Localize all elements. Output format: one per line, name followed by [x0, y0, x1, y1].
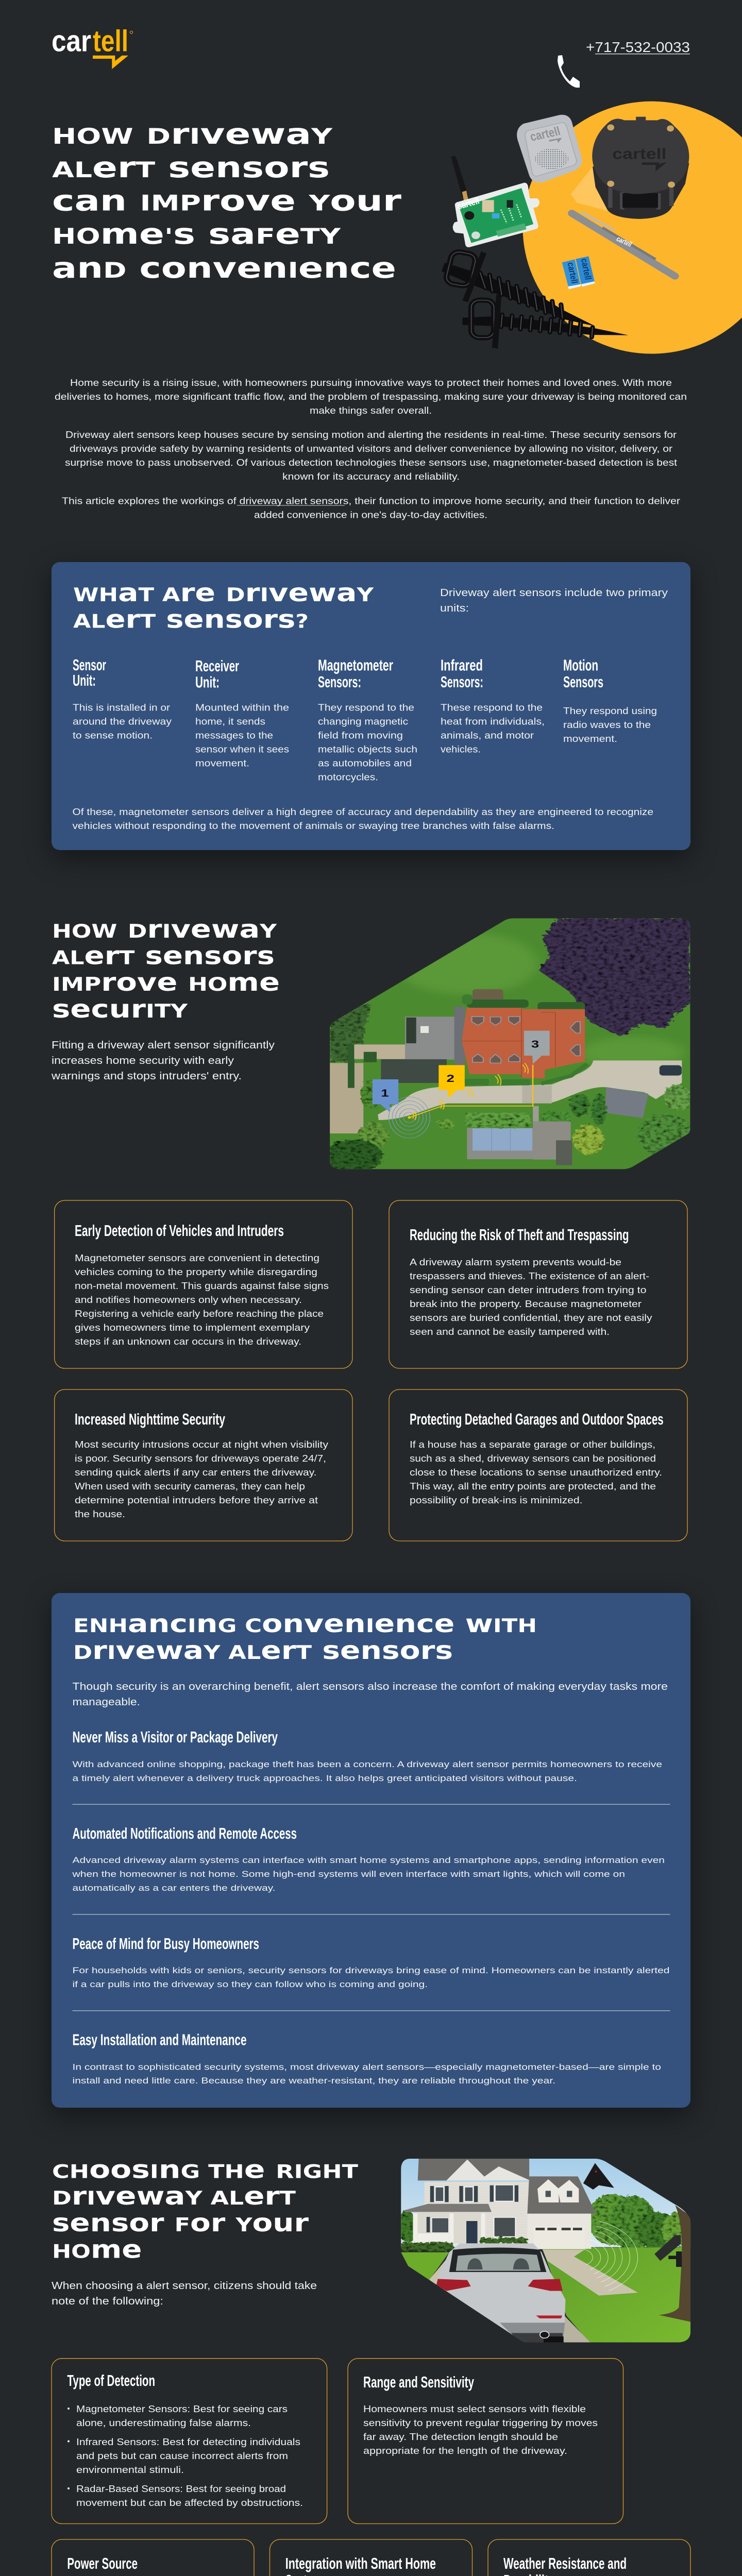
card: detached garages: If a house has a separate garage or other buildings,	[410, 1439, 655, 1450]
dark outbuilding roof	[381, 1059, 447, 1083]
column: infrared sensors: animals, and motor	[441, 731, 534, 741]
column: sensor unit	[73, 656, 172, 741]
intro text: driveways provide safety by warning residents of unwanted visitors and deliver convenience by allowing no visitor, delivery, or	[70, 444, 672, 454]
card: type of detection: Type of Detection	[67, 2371, 155, 2389]
icon: phone handset	[558, 55, 580, 88]
batteries: cartell	[565, 262, 579, 284]
item: automated notifications: Automated Notifications and Remote Access	[72, 1824, 297, 1842]
heading: ENH anc InG C onven Ience w ITH	[73, 1609, 537, 1638]
hero product illustration	[442, 101, 742, 354]
section intro text: Fitting a driveway alert sensor significantly	[52, 1040, 275, 1051]
card: early detection: steps if an unknown car occurs in the driveway.	[75, 1336, 301, 1347]
card: smart home integration	[270, 2539, 472, 2576]
column: receiver unit: home, it sends	[195, 716, 265, 726]
column: infrared sensors: These respond to the	[441, 703, 543, 713]
car	[436, 2243, 565, 2343]
card: nighttime security: sending quick alerts if any car enters the driveway.	[75, 1467, 316, 1478]
aerial house image with sensor markers	[324, 912, 696, 1175]
intro note: Driveway alert sensors include two primary	[440, 587, 668, 599]
garden left	[330, 1003, 369, 1063]
card: early detection: vehicles coming to the property while disregarding	[75, 1267, 317, 1277]
card: nighttime security: Most security intrusions occur at night when visibility	[75, 1439, 328, 1450]
item: never miss a visitor	[72, 1728, 662, 1783]
hero title	[52, 117, 401, 284]
column: infrared sensors: Infrared	[441, 656, 483, 674]
header phone number: +717-532-0033	[586, 39, 690, 55]
card: power source	[52, 2539, 254, 2576]
detection arcs	[584, 2222, 638, 2291]
house	[404, 2159, 596, 2249]
card: early detection: gives homeowners time to implement exemplary	[75, 1323, 310, 1333]
column: magnetometer sensors: metallic objects such	[318, 744, 417, 754]
item: never miss a visitor: a timely alert whenever a delivery truck approaches. It also helps greet anticipated visitors without pause.	[72, 1773, 577, 1783]
card: nighttime security: determine potential intruders before they arrive at	[75, 1495, 318, 1505]
intro paragraph	[72, 1681, 668, 1708]
column: sensor unit: around the driveway	[73, 716, 172, 726]
card: weather resistance	[488, 2539, 690, 2576]
column: magnetometer sensors	[318, 656, 417, 782]
intro text: added convenience in one's day-to-day activities.	[254, 510, 487, 520]
section intro text	[51, 1040, 275, 1082]
card: nighttime security: When used with security cameras, they can help	[75, 1481, 305, 1492]
item: automated notifications: Advanced driveway alarm systems can interface with smart home systems and smartphone apps, sending information even	[72, 1855, 665, 1865]
driveway	[543, 2250, 638, 2296]
section heading: how sensors improve security: IMP rove HO me	[52, 968, 280, 997]
card: early detection: Early Detection of Vehicles and Intruders	[75, 1222, 284, 1240]
item: peace of mind	[72, 1935, 670, 1989]
hedges along the house	[464, 1079, 489, 1086]
section heading: choosing the right sensor: HO me	[52, 2235, 142, 2264]
heading	[73, 579, 375, 634]
section intro text: When choosing a alert sensor, citizens should take	[52, 2280, 317, 2292]
compost heap and hedges	[473, 989, 503, 999]
column: motion sensors: Motion	[563, 656, 598, 674]
column: sensor unit: to sense motion.	[73, 731, 153, 741]
column: infrared sensors: Sensors:	[441, 673, 483, 691]
column: sensor unit: Unit:	[73, 671, 96, 689]
screw stakes	[442, 251, 629, 349]
card: detached garages: such as a shed, driveway sensors can be positioned	[410, 1453, 656, 1464]
card: early detection: non-metal movement. This guards against false signs	[75, 1281, 329, 1291]
card: weather resistance: Weather Resistance and	[503, 2554, 627, 2572]
card: type of detection: environmental stimuli.	[76, 2465, 184, 2475]
card: range and sensitivity: Range and Sensitivity	[363, 2373, 475, 2391]
card: nighttime security: the house.	[75, 1509, 125, 1519]
column: infrared sensors	[441, 656, 545, 754]
driveway	[378, 1060, 682, 1120]
card: range and sensitivity: sensitivity to prevent regular triggering by moves	[363, 2418, 598, 2428]
card: type of detection: movement but can be affected by obstructions.	[76, 2498, 303, 2508]
shrubs	[401, 2238, 528, 2251]
yellow circle backdrop	[522, 101, 742, 354]
card: nighttime security	[55, 1389, 352, 1541]
intro paragraph: manageable.	[72, 1697, 140, 1708]
closing note: Of these, magnetometer sensors deliver a high degree of accuracy and dependability as they are engineered to recognize	[72, 807, 653, 817]
intro text: deliveries to homes, more significant traffic flow, and the problem of trespassing, making sure your driveway is being monitored can	[55, 392, 687, 402]
section intro text: warnings and stops intruders' entry.	[51, 1071, 242, 1082]
card: detached garages: This way, all the entry points are protected, and the	[410, 1481, 656, 1492]
column: infrared sensors: heat from individuals,	[441, 716, 545, 726]
hero title: HOW DrIvewa Y	[52, 117, 333, 150]
card: reducing risk	[389, 1200, 687, 1368]
marker 3	[524, 1031, 550, 1064]
column: magnetometer sensors: field from moving	[318, 731, 403, 741]
marker 2	[439, 1065, 465, 1098]
receiver unit	[517, 115, 582, 182]
batteries: cartell	[579, 258, 593, 280]
item: easy installation: Easy Installation and Maintenance	[72, 2031, 246, 2048]
header logo	[52, 24, 133, 69]
lawns	[542, 2247, 690, 2343]
marker 1: 1	[381, 1088, 389, 1099]
panel: what are driveway alert sensors	[52, 562, 690, 850]
section heading: how sensors improve security: secur ITY	[52, 995, 189, 1024]
item: peace of mind: For households with kids or seniors, security sensors for driveways bring ease of mind. Homeowners can be instantly alerted	[72, 1965, 670, 1975]
pen	[572, 212, 675, 276]
item: peace of mind: Peace of Mind for Busy Homeowners	[72, 1935, 259, 1953]
card: reducing risk: sensors are buried confidential, they are not easily	[410, 1313, 652, 1323]
heading: ALer T sensors ?	[73, 605, 309, 634]
wall camera	[654, 2235, 682, 2267]
marker 2: 2	[446, 1073, 454, 1084]
heading	[73, 1609, 537, 1665]
card: nighttime security: is poor. Security sensors for driveways operate 24/7,	[75, 1453, 326, 1464]
receiver unit: cartell	[529, 125, 562, 144]
column: motion sensors: Sensors	[563, 673, 603, 691]
column: sensor unit: Sensor	[73, 656, 106, 674]
column: magnetometer sensors: as automobiles and	[318, 758, 412, 769]
terrace	[405, 1016, 456, 1060]
card: smart home integration: Integration with Smart Home	[285, 2554, 436, 2572]
column: receiver unit: sensor when it sees	[195, 744, 289, 754]
marker 1	[373, 1079, 398, 1112]
receiver board with antenna	[451, 156, 539, 247]
card: type of detection: alone, underestimating false alarms.	[76, 2418, 251, 2428]
column: receiver unit: Mounted within the	[195, 703, 289, 713]
section intro text: note of the following:	[52, 2296, 163, 2307]
intro text: Home security is a rising issue, with homeowners pursuing innovative ways to protect their homes and loved ones. With more	[70, 378, 672, 388]
section heading: how sensors improve security	[52, 915, 280, 1024]
photo: house, car and driveway sensor	[397, 2158, 696, 2343]
item: easy installation: install and need little care. Because they are weather-resistant, they are reliable throughout the year.	[72, 2076, 555, 2086]
shed and car	[605, 1087, 648, 1118]
card: reducing risk: A driveway alarm system prevents would-be	[410, 1257, 621, 1267]
closing note	[72, 807, 653, 831]
column: motion sensors: radio waves to the	[563, 720, 651, 730]
card: range and sensitivity: appropriate for the length of the driveway.	[363, 2446, 567, 2456]
card: range and sensitivity: Homeowners must select sensors with flexible	[363, 2404, 586, 2414]
card: type of detection	[52, 2359, 327, 2523]
item: peace of mind: if a car pulls into the driveway so they can follow who is coming and going.	[72, 1979, 428, 1989]
detection rings	[389, 1097, 430, 1138]
card: detached garages: possibility of break-ins is minimized.	[410, 1495, 582, 1505]
card: early detection: Magnetometer sensors are convenient in detecting	[75, 1253, 319, 1263]
section heading: how sensors improve security: HOW DrIvewa Y	[52, 915, 278, 944]
item: automated notifications	[72, 1824, 665, 1893]
bushes	[324, 1079, 693, 1172]
swimming pool	[467, 1128, 533, 1159]
magnetometer sensor	[592, 117, 689, 219]
section heading: how sensors improve security: ALer T sensors	[52, 942, 275, 971]
column: receiver unit: Receiver	[195, 657, 239, 675]
card: reducing risk: trespassers and thieves. The existence of an alert-	[410, 1271, 649, 1281]
card: reducing risk: seen and cannot be easily tampered with.	[410, 1327, 610, 1337]
section heading: choosing the right sensor	[52, 2156, 358, 2264]
trees	[398, 2194, 693, 2250]
main roof	[462, 1008, 585, 1078]
column: motion sensors	[563, 656, 657, 744]
section heading: choosing the right sensor: CH oos InG TH e RIGHT	[52, 2156, 358, 2184]
intro text: make things safer overall.	[310, 405, 432, 416]
tree trunk	[659, 2205, 690, 2322]
intro text: This article explores the workings of driveway alert sensors, their function to improve home security, and their function to deliver	[62, 496, 680, 506]
column: sensor unit: This is installed in or	[73, 703, 170, 713]
intro text	[55, 378, 687, 520]
pen: cartell	[615, 235, 633, 248]
card: nighttime security: Increased Nighttime Security	[75, 1410, 226, 1428]
closing note: vehicles without responding to the movement of animals or swaying tree branches with false alarms.	[72, 821, 554, 831]
card: early detection	[55, 1200, 352, 1368]
column: receiver unit: Unit:	[195, 673, 220, 691]
heading: WH aT A re DrIvewa Y	[73, 579, 375, 607]
card: reducing risk: break into the property. Because magnetometer	[410, 1299, 642, 1309]
item: easy installation: In contrast to sophisticated security systems, most driveway alert sensors—especially magnetometer-based—are simple to	[72, 2062, 661, 2072]
card: range and sensitivity	[348, 2359, 623, 2523]
column: receiver unit: messages to the	[195, 731, 273, 741]
heading: DrIvewa Y AL er T sensors	[73, 1636, 453, 1665]
receiver board with antenna: cartell	[456, 196, 481, 211]
card: range and sensitivity: far away. The detection length should be	[363, 2432, 558, 2442]
marker 3: 3	[531, 1039, 539, 1050]
purple tree	[539, 918, 690, 1037]
intro text: surprise move to pass unobserved. Of various detection technologies these sensors use, magnetometer-based detection is best	[65, 457, 677, 468]
header logo: car	[52, 24, 91, 58]
batteries	[562, 256, 595, 289]
card: type of detection: Infrared Sensors: Best for detecting individuals	[76, 2437, 300, 2447]
hero title: can IMP rove Your	[52, 184, 401, 217]
section heading: choosing the right sensor: sensor For Your	[52, 2209, 309, 2238]
card: type of detection: Magnetometer Sensors: Best for seeing cars	[76, 2404, 288, 2414]
column: motion sensors: They respond using	[563, 706, 657, 716]
card: detached garages	[389, 1389, 687, 1541]
intro text: Driveway alert sensors keep houses secure by sensing motion and alerting the residents in real-time. These security sensors for	[65, 430, 677, 440]
hero title: an D conven Ience	[52, 251, 396, 284]
card: type of detection: Radar-Based Sensors: Best for seeing broad	[76, 2484, 286, 2494]
column: magnetometer sensors: motorcycles.	[318, 772, 378, 782]
item: never miss a visitor: With advanced online shopping, package theft has been a concern. A driveway alert sensor permits homeowners to receive	[72, 1759, 662, 1769]
card: reducing risk: sending sensor can deter intruders from trying to	[410, 1285, 646, 1295]
column: magnetometer sensors: They respond to the	[318, 703, 414, 713]
item: never miss a visitor: Never Miss a Visitor or Package Delivery	[72, 1728, 278, 1746]
column: infrared sensors: vehicles.	[441, 744, 481, 754]
intro text: known for its accuracy and reliability.	[282, 471, 460, 482]
header logo: tell	[93, 24, 128, 58]
item: automated notifications: automatically as a car enters the driveway.	[72, 1883, 275, 1893]
item: automated notifications: when the homeowner is not home. Some high-end systems will even interface with smart lights, which will come on	[72, 1869, 625, 1879]
dormers	[472, 1016, 580, 1063]
column: receiver unit: movement.	[195, 758, 249, 769]
intro paragraph: Though security is an overarching benefit, alert sensors also increase the comfort of making everyday tasks more	[72, 1681, 668, 1692]
section intro text: increases home security with early	[52, 1055, 234, 1066]
card: detached garages: close to these locations to sense unauthorized entry.	[410, 1467, 662, 1478]
sensor link line	[409, 1065, 533, 1117]
haze	[571, 166, 609, 211]
column: magnetometer sensors: changing magnetic	[318, 716, 408, 726]
column: receiver unit	[195, 657, 289, 769]
card: type of detection: and pets but can cause incorrect alerts from	[76, 2451, 288, 2461]
section intro text	[52, 2280, 317, 2307]
panel: enhancing convenience	[52, 1593, 690, 2108]
column: magnetometer sensors: Sensors:	[318, 673, 361, 691]
item: easy installation	[72, 2031, 661, 2086]
card: early detection: and notifies homeowners only when necessary.	[75, 1295, 302, 1305]
column: magnetometer sensors: Magnetometer	[318, 656, 393, 674]
roof sensor device	[583, 2163, 614, 2190]
magnetometer sensor: cartell	[612, 145, 666, 162]
card: early detection: Registering a vehicle early before reaching the place	[75, 1309, 324, 1319]
column: motion sensors: movement.	[563, 734, 617, 744]
card: power source: Power Source	[67, 2554, 138, 2572]
intro note: units:	[440, 603, 469, 614]
card: reducing risk: Reducing the Risk of Theft and Trespassing	[410, 1226, 629, 1244]
intro note	[440, 587, 668, 614]
hero title: HO me 's sa Fe TY	[52, 217, 341, 250]
section heading: choosing the right sensor: DrIvewa Y AL er T	[52, 2182, 296, 2211]
hero title: AL er T sensors	[52, 151, 330, 184]
